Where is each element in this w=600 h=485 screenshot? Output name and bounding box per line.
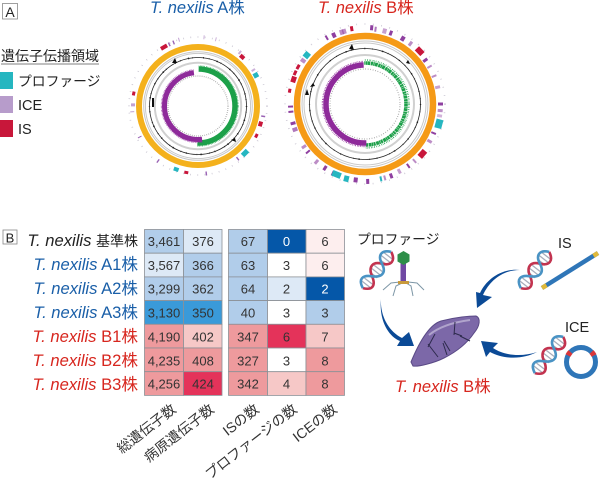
heatmap: gene counts: 402 [192, 330, 214, 344]
strain labels: T. nexilis A2株 [33, 279, 138, 298]
arrow: ICE to cell [481, 341, 537, 358]
legend: 遺伝子伝播領域: 遺伝子伝播領域 [1, 48, 99, 64]
heatmap: gene counts: 3,130 [148, 306, 180, 320]
panel: A [0, 0, 445, 184]
heatmap: mobile element counts: 3 [283, 354, 290, 368]
heatmap: gene counts: 3,461 [148, 234, 180, 249]
panel: B [3, 230, 598, 482]
heatmap: mobile element counts: 6 [283, 330, 290, 344]
heatmap: mobile element counts: 3 [283, 258, 290, 273]
outer gene marks: prophage [303, 51, 443, 182]
outer gene marks: IS [288, 26, 427, 159]
strain labels: T. nexilis A1株 [33, 255, 138, 274]
heatmap: gene counts: 3,299 [148, 282, 180, 296]
circular genome: B strain [285, 24, 445, 184]
column labels: プロファージの数 [202, 401, 300, 482]
heatmap: mobile element counts: 6 [321, 258, 329, 273]
column labels: ISの数 [220, 401, 262, 439]
heatmap: mobile element counts: 8 [321, 376, 329, 392]
outer gene marks: ICE [288, 25, 443, 184]
column labels: ICEの数 [290, 401, 340, 445]
circular genome: A strain [129, 35, 267, 176]
icon: bacterial cell [411, 316, 479, 366]
panel label B: B [6, 230, 14, 246]
arrow: prophage to cell [381, 299, 414, 346]
heatmap: mobile element counts: 2 [283, 282, 290, 296]
heatmap: mobile element counts: 327 [237, 354, 259, 368]
legend: 遺伝子伝播領域 [0, 48, 101, 138]
heatmap: gene counts: 362 [192, 282, 214, 296]
heatmap: mobile element counts: 67 [241, 234, 255, 249]
heatmap: mobile element counts: 0 [283, 234, 290, 249]
heatmap: mobile element counts [228, 230, 344, 395]
heatmap: mobile element counts: 7 [321, 330, 329, 344]
strain labels [27, 231, 138, 394]
legend: 遺伝子伝播領域: プロファージ [18, 74, 101, 89]
strain labels: T. nexilis B2株 [33, 351, 138, 370]
heatmap: mobile element counts: 2 [321, 282, 329, 296]
strain labels: T. nexilis B3株 [33, 375, 138, 394]
spikes on GC track [152, 58, 236, 142]
panel label A: A [5, 4, 15, 20]
strain labels: T. nexilis 基準株 [27, 231, 138, 250]
heatmap: mobile element counts: 63 [241, 258, 255, 273]
label: prophage: プロファージ [357, 232, 440, 247]
heatmap: gene counts: 424 [192, 376, 214, 392]
icon: DNA IS [515, 248, 555, 292]
heatmap: gene counts: 408 [192, 354, 214, 368]
heatmap: gene counts: 350 [192, 306, 214, 320]
strain labels: T. nexilis A3株 [33, 303, 138, 322]
heatmap: mobile element counts: 342 [237, 376, 259, 392]
heatmap: gene counts: 366 [192, 258, 214, 273]
arrow: IS to cell [476, 270, 520, 308]
icon: IS rod [542, 253, 598, 288]
icon: phage [383, 251, 424, 296]
heatmap: mobile element counts: 64 [241, 282, 255, 296]
heatmap: gene counts: 3,567 [148, 258, 180, 273]
outer gene marks: ICE [130, 35, 265, 176]
schematic: gene transfer [357, 232, 598, 396]
label: ICE: ICE [565, 320, 590, 336]
legend: 遺伝子伝播領域: ICE [18, 98, 42, 114]
heatmap: mobile element counts: 347 [237, 330, 259, 344]
icon: DNA ICE [529, 333, 569, 377]
icon: ICE ring [566, 348, 596, 376]
heatmap: mobile element counts: 3 [321, 306, 329, 320]
label: IS: IS [558, 236, 572, 252]
icon: DNA prophage [357, 248, 397, 292]
outer gene marks: IS [132, 44, 263, 174]
heatmap: gene counts: 4,256 [148, 376, 180, 392]
panel label A [2, 4, 18, 20]
strain labels: T. nexilis B1株 [33, 327, 138, 346]
column labels: 病原遺伝子数 [141, 401, 217, 465]
outer gene marks: prophage [173, 72, 259, 172]
heatmap: mobile element counts: 3 [283, 306, 290, 320]
heatmap: mobile element counts: 8 [321, 354, 329, 368]
heatmap: gene counts: 4,190 [148, 330, 180, 344]
label: B strain: T. nexilis B株 [395, 377, 491, 396]
heatmap: mobile element counts: 6 [321, 234, 329, 249]
heatmap: gene counts [144, 230, 222, 395]
heatmap: mobile element counts: 40 [241, 306, 255, 320]
column labels [114, 401, 340, 482]
spikes on GC track [305, 44, 410, 95]
column labels: 総遺伝子数 [114, 401, 179, 456]
heatmap: mobile element counts: 4 [283, 376, 290, 392]
panel label B [3, 230, 17, 246]
heatmap: gene counts: 4,235 [148, 354, 180, 368]
legend: 遺伝子伝播領域: IS [18, 122, 32, 138]
heatmap: gene counts: 376 [192, 234, 214, 249]
